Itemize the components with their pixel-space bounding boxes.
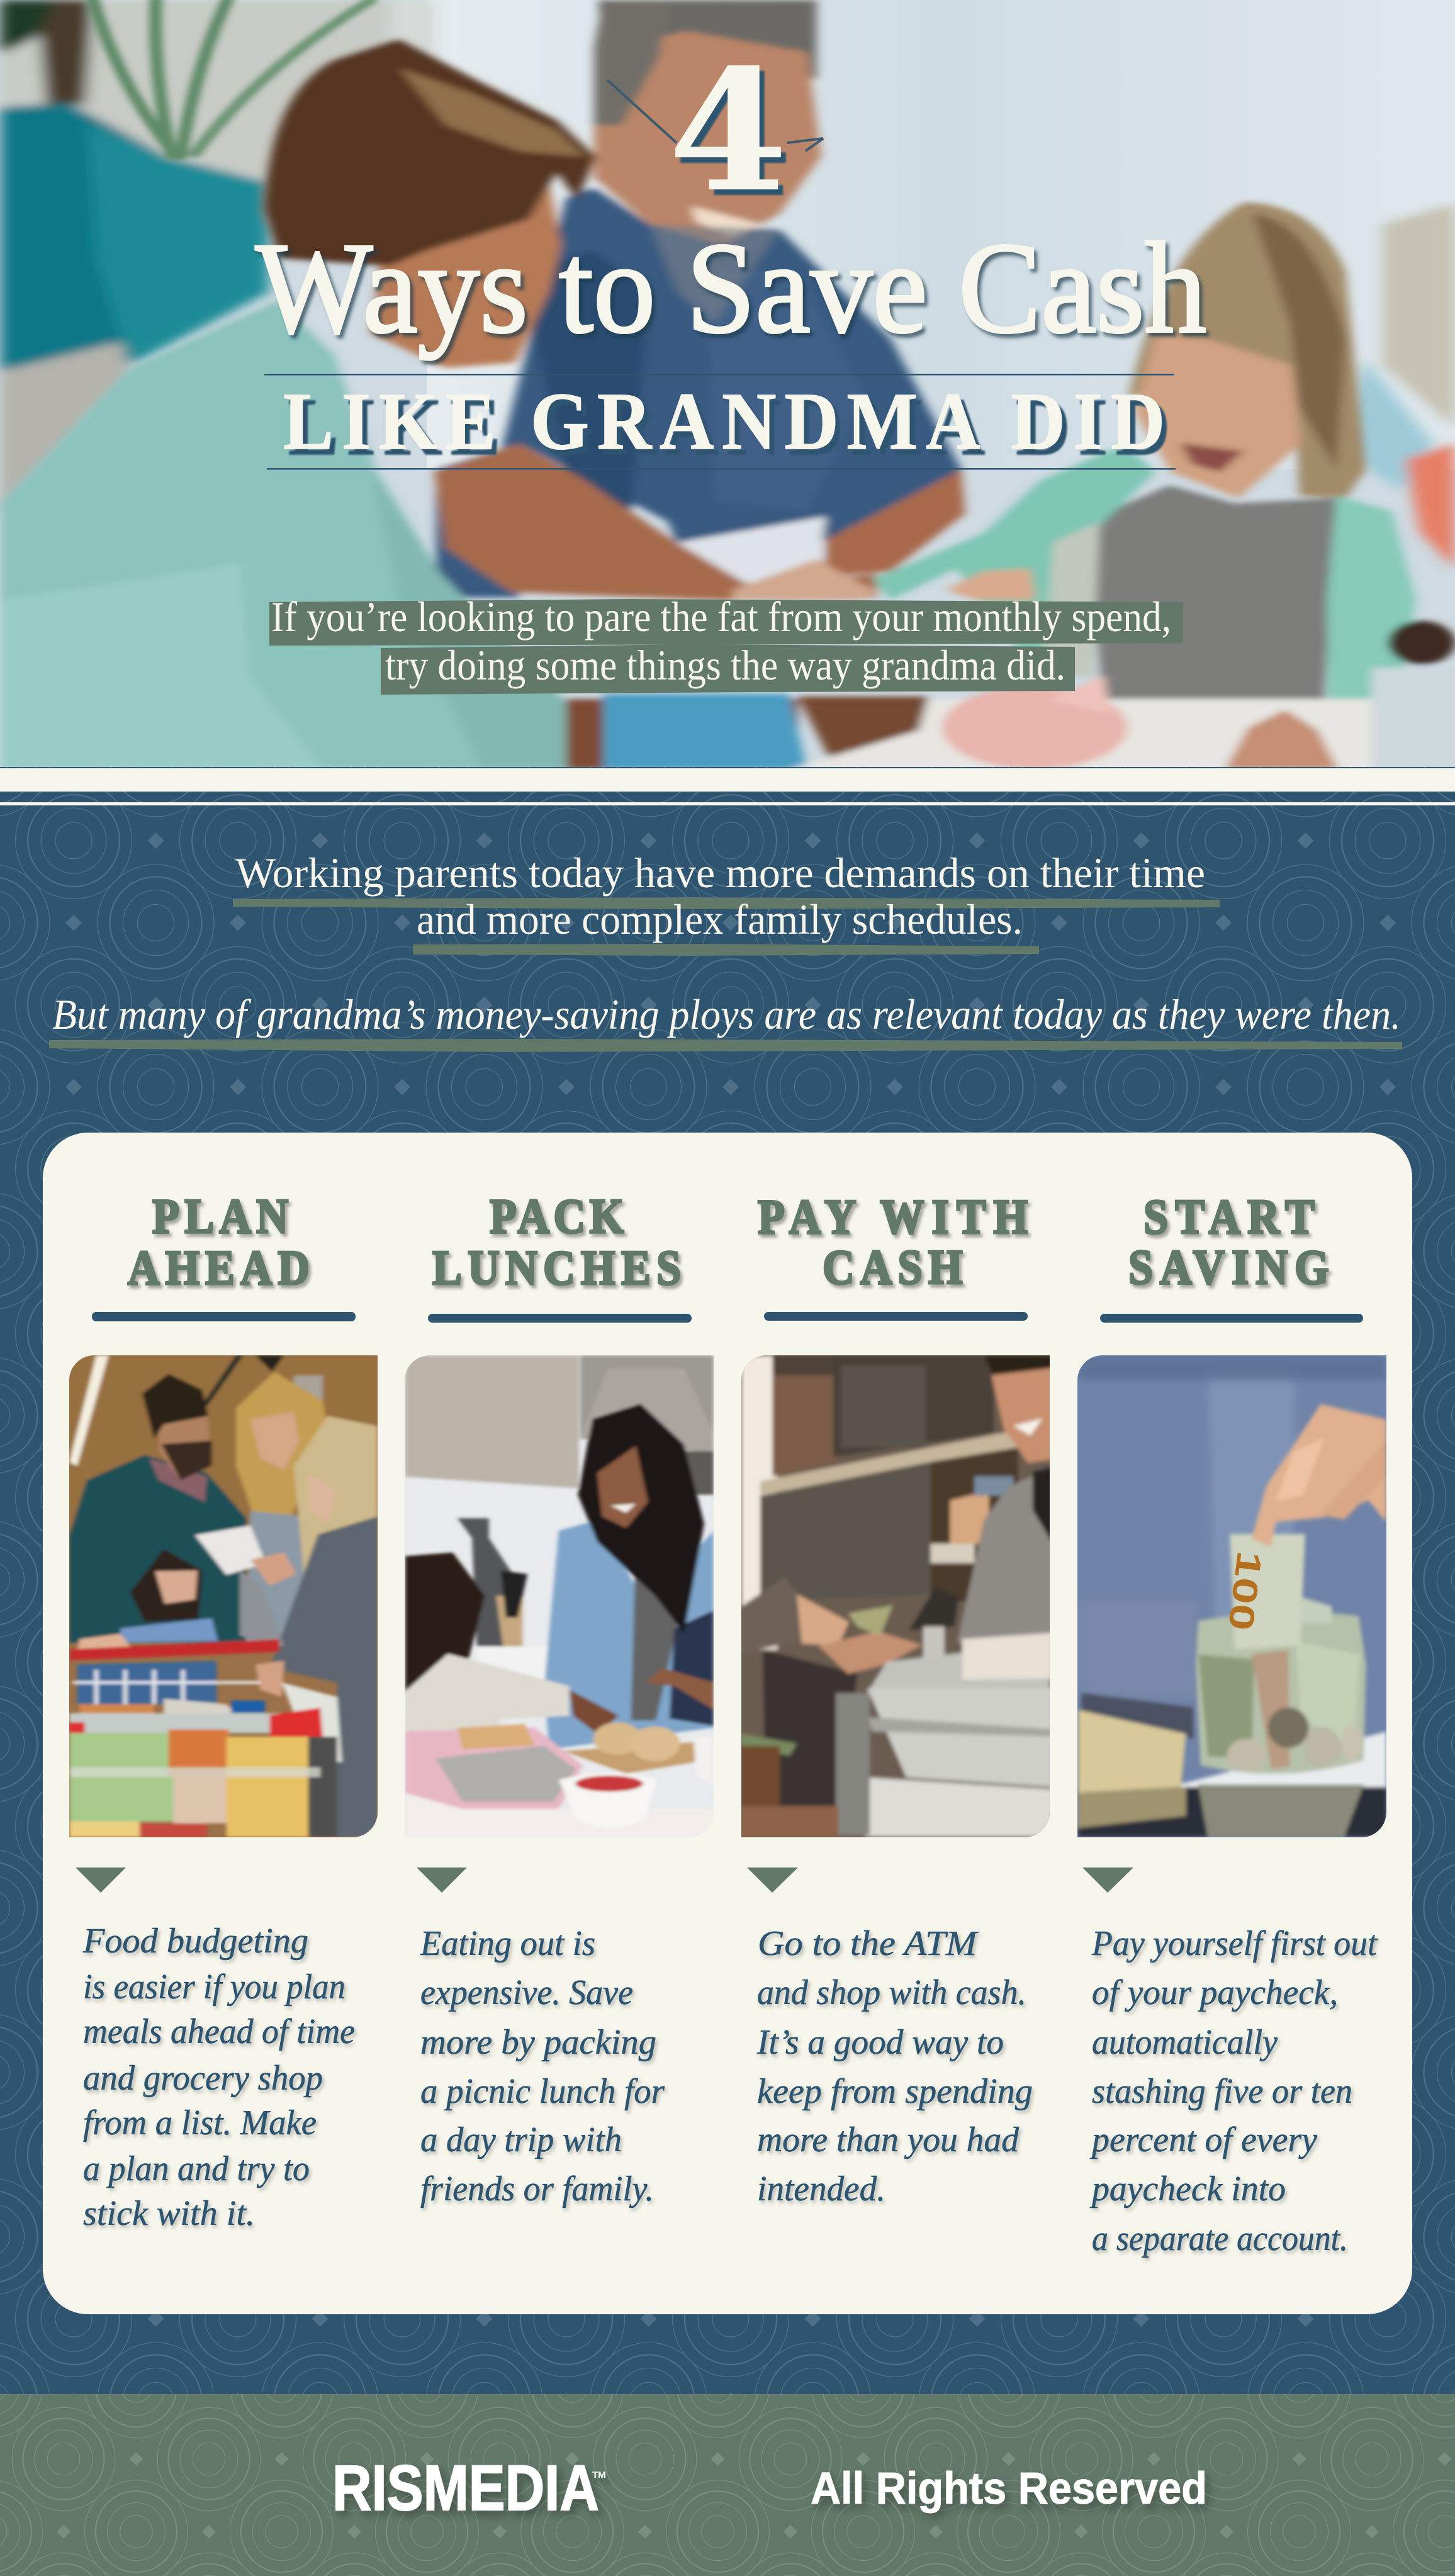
intro text block: and more complex family schedules. <box>417 895 1023 943</box>
description text: percent of every <box>1089 2120 1317 2159</box>
patterned navy background <box>0 767 1455 2394</box>
description text: a separate account. <box>1092 2219 1348 2258</box>
description text <box>756 1924 1033 2209</box>
column 4: start saving <box>1077 1190 1390 2258</box>
description text: keep from spending <box>757 2072 1033 2111</box>
heading: pay with cash <box>758 1190 1028 1295</box>
grandma <box>0 300 566 770</box>
logo: RISMedia: TM <box>592 2470 606 2480</box>
heading: start saving: START <box>1143 1190 1315 1245</box>
subtitle rule bottom <box>267 468 1176 469</box>
intro callout with green highlight: try doing some things the way grandma did. <box>385 641 1065 689</box>
description text <box>1089 1924 1378 2258</box>
intro callout with green highlight: If you’re looking to pare the fat from your monthly spend, <box>271 593 1171 641</box>
description text: Eating out is <box>420 1924 595 1963</box>
heading: pack lunches: PACK <box>490 1190 624 1244</box>
description text: Food budgeting <box>82 1922 308 1961</box>
column 3: pay with cash <box>741 1190 1053 2209</box>
heading bar <box>428 1314 692 1323</box>
description text: intended. <box>757 2170 885 2209</box>
heading: plan ahead: AHEAD <box>128 1241 310 1296</box>
description text: a picnic lunch for <box>420 2072 665 2111</box>
description text: stashing five or ten <box>1092 2072 1352 2111</box>
description text: stick with it. <box>83 2194 255 2233</box>
hand, table, objects <box>566 699 798 770</box>
description text: and shop with cash. <box>757 1973 1026 2012</box>
description text: friends or family. <box>420 2170 654 2209</box>
description text: Pay yourself first out <box>1091 1924 1378 1963</box>
description text: a plan and try to <box>83 2149 310 2188</box>
description text: a day trip with <box>420 2120 622 2159</box>
intro text block: But many of grandma’s money-saving ploys are as relevant today as they were then. <box>52 990 1401 1038</box>
description text <box>82 1922 355 2233</box>
description text: and grocery shop <box>83 2059 323 2098</box>
description text <box>420 1924 665 2209</box>
footer text: all rights reserved: All Rights Reserved <box>811 2464 1207 2514</box>
subtitle: LIKE GRANDMA DID: LIKE GRANDMA DID <box>283 377 1165 467</box>
triangle marker <box>747 1868 798 1893</box>
description text: paycheck into <box>1089 2170 1286 2209</box>
bill denomination on the hundred dollar note: 100 <box>1221 1549 1269 1633</box>
glasses <box>607 80 823 151</box>
logo: RISMedia: RISMEDIA <box>332 2452 599 2524</box>
heading bar <box>764 1312 1028 1321</box>
description text: meals ahead of time <box>83 2012 355 2051</box>
heading bar <box>1100 1314 1363 1323</box>
intro text block: Working parents today have more demands on their time <box>235 849 1205 897</box>
subtitle rule top <box>264 374 1174 375</box>
heading bar <box>92 1312 356 1321</box>
triangle marker <box>417 1868 467 1893</box>
description text: Go to the ATM <box>758 1924 979 1963</box>
footer band <box>0 2394 1455 2576</box>
description text: automatically <box>1092 2023 1278 2062</box>
heading: start saving: SAVING <box>1128 1241 1329 1295</box>
heading: pack lunches <box>432 1190 681 1296</box>
cream divider band <box>0 768 1455 792</box>
intro callout with green highlight <box>269 593 1183 695</box>
description text: from a list. Make <box>83 2103 317 2142</box>
triangle marker <box>76 1868 126 1893</box>
photo: hand putting cash in a jar <box>1077 1355 1390 1837</box>
description text: It’s a good way to <box>756 2023 1004 2062</box>
photo: mother and child packing lunch <box>405 1355 714 1838</box>
photo: family grocery shopping <box>69 1355 378 1837</box>
heading: pay with cash: PAY WITH <box>758 1190 1028 1245</box>
heading: plan ahead <box>128 1190 310 1296</box>
panel: four tips card <box>43 1133 1412 2314</box>
description text: expensive. Save <box>420 1973 633 2012</box>
heading: pack lunches: LUNCHES <box>432 1241 681 1296</box>
description text: more than you had <box>757 2120 1020 2159</box>
description text: is easier if you plan <box>83 1968 345 2007</box>
heading: pay with cash: CASH <box>823 1241 962 1295</box>
girl <box>1128 203 1366 498</box>
description text: of your paycheck, <box>1092 1973 1338 2012</box>
column 2: pack lunches <box>405 1190 714 2209</box>
dad <box>436 188 962 597</box>
description text: more by packing <box>420 2023 656 2062</box>
title number 4: 4 <box>668 32 788 229</box>
hero photo: grandmother, father and daughter with piggy bank <box>0 0 1455 772</box>
cream divider line <box>0 802 1455 805</box>
photo: paying a cashier with cash <box>741 1355 1053 1837</box>
heading: start saving <box>1128 1190 1329 1295</box>
intro text block <box>49 849 1402 1052</box>
title: Ways to Save Cash: Ways to Save Cash <box>256 216 1206 360</box>
triangle marker <box>1082 1868 1133 1893</box>
heading: plan ahead: PLAN <box>152 1190 288 1244</box>
column 1: plan ahead <box>69 1190 378 2233</box>
